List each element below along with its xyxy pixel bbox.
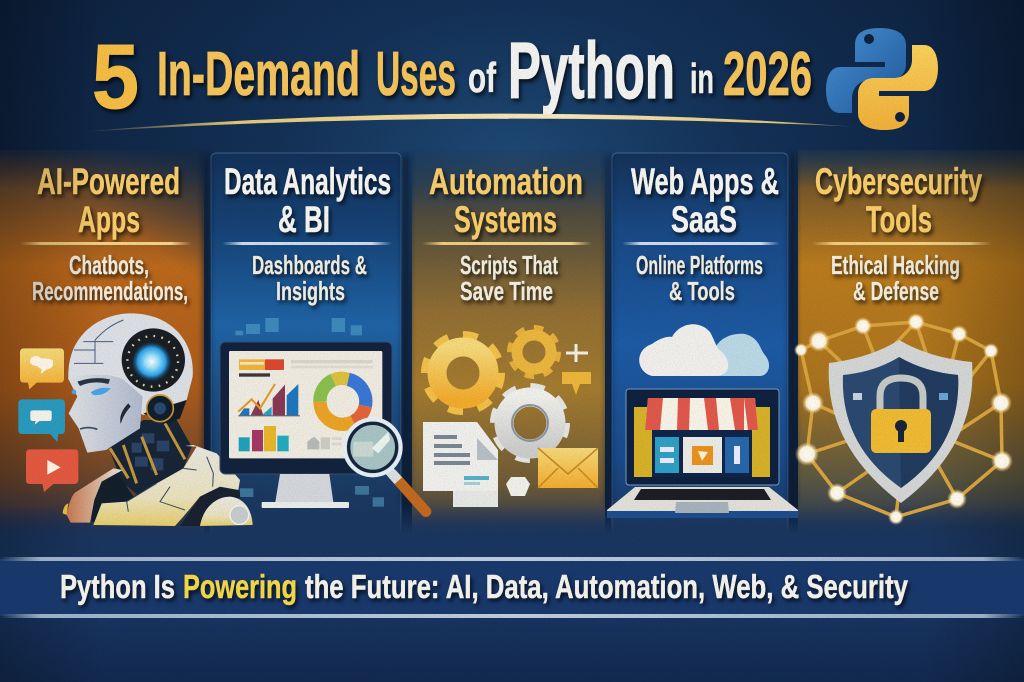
heading: Automation Systems: Automation: [429, 161, 583, 202]
title swoosh: [80, 114, 860, 132]
heading: Data Analytics & BI: Data Analytics: [224, 161, 391, 202]
illustration: robot with chat icons: [18, 313, 253, 526]
icon: small yellow tag: [562, 372, 591, 395]
title: In-Demand: [157, 40, 360, 109]
icon: small blue cloud: [712, 334, 769, 376]
heading: Data Analytics & BI: [224, 161, 391, 240]
title: 2026: [723, 40, 812, 109]
title: 5: [92, 26, 139, 128]
gear: small gold: [510, 328, 558, 376]
shop interior: [652, 428, 752, 477]
icon: orange chat bubble: [20, 348, 64, 389]
heading: AI-Powered Apps: [37, 161, 180, 240]
icon: envelope: [538, 448, 598, 488]
shop awning: [645, 398, 758, 430]
footer tagline: Powering: [183, 568, 297, 605]
footer band: [0, 557, 1024, 618]
donut chart: [320, 378, 366, 424]
icon: white connector: [506, 477, 530, 496]
network lines: [801, 322, 1002, 517]
illustration: cybersecurity shield and network: [794, 313, 1013, 525]
robot head: [68, 313, 193, 453]
heading: Cybersecurity Tools: [815, 161, 982, 240]
bottom band background: [0, 505, 1024, 682]
icon: red video bubble: [26, 449, 78, 492]
title: in: [690, 55, 714, 102]
small icons: [307, 437, 342, 449]
bar columns: [239, 426, 289, 451]
panel: AI-Powered Apps: [0, 150, 204, 535]
robot neck: [108, 420, 192, 500]
dashboard header: [239, 359, 373, 377]
heading: Automation Systems: [429, 161, 583, 240]
subtitle: dashboards: Dashboards &: [252, 250, 367, 280]
gear: silver: [495, 388, 565, 458]
laptop base: [607, 487, 798, 518]
panel: Data Analytics & BI: [211, 153, 401, 535]
heading: Data Analytics & BI: & BI: [278, 199, 330, 240]
subtitle: scripts: [460, 250, 558, 306]
monitor stand: [262, 474, 349, 508]
subtitle: platforms: [636, 250, 763, 306]
icon: plus sign: [566, 344, 588, 362]
footer tagline: Python Is: [60, 568, 175, 605]
subtitle: scripts: Scripts That: [460, 250, 558, 280]
heading: Cybersecurity Tools: Tools: [866, 199, 932, 240]
title: Python: [508, 26, 675, 115]
panel shadows: [203, 155, 796, 505]
subtitle: ethical hacking: [831, 250, 960, 306]
heading: Automation Systems: Systems: [454, 199, 557, 240]
subtitle: chatbots: [32, 250, 188, 306]
icon: python logo: [826, 28, 938, 130]
title: Uses: [376, 40, 456, 109]
title: [92, 26, 812, 128]
network nodes: [794, 313, 1013, 525]
data pixels: [235, 318, 384, 507]
heading: AI-Powered Apps: AI-Powered: [37, 161, 180, 202]
divider: [812, 242, 992, 245]
robot body: [63, 445, 253, 526]
subtitle: ethical hacking: Ethical Hacking: [831, 250, 960, 280]
robot ear joint: [143, 383, 193, 423]
heading: Web Apps & SaaS: [631, 161, 779, 240]
title: of: [468, 54, 497, 101]
subtitle: dashboards: Insights: [276, 276, 345, 306]
subtitle: platforms: Online Platforms: [636, 250, 763, 280]
illustration: automation gears and documents: [423, 328, 598, 507]
heading: Web Apps & SaaS: Web Apps &: [631, 161, 779, 202]
icon: magnifying glass: [345, 419, 426, 512]
heading: AI-Powered Apps: Apps: [78, 199, 140, 240]
subtitle: ethical hacking: & Defense: [853, 276, 939, 306]
shop panels: [655, 437, 749, 473]
laptop screen: [626, 389, 779, 485]
divider: [222, 242, 392, 245]
panel: Automation Systems: [412, 150, 605, 535]
divider: [422, 242, 592, 245]
icon: front document: [423, 422, 498, 491]
subtitle: dashboards: [252, 250, 367, 306]
subtitle: chatbots: Recommendations,: [32, 276, 188, 306]
line and bar chart: [238, 384, 300, 416]
divider: [20, 242, 192, 245]
illustration: web app laptop with cloud: [607, 324, 798, 518]
illustration: dashboard monitor: [220, 318, 392, 508]
footer tagline: [60, 568, 908, 605]
panel: Web Apps & SaaS: [612, 153, 788, 535]
divider: [622, 242, 780, 245]
icon: back document: [453, 463, 498, 507]
shield: [829, 340, 972, 503]
icon: big white cloud: [639, 324, 728, 376]
monitor screen: [229, 351, 382, 458]
gear: large gold: [426, 336, 500, 410]
subtitle: scripts: Save Time: [460, 276, 553, 306]
panel: Cybersecurity Tools: [798, 150, 1024, 535]
heading: Web Apps & SaaS: SaaS: [671, 199, 737, 240]
monitor frame: [220, 342, 392, 474]
icon: teal chat bubble: [18, 399, 65, 442]
subtitle: chatbots: Chatbots,: [69, 250, 149, 280]
padlock: [871, 378, 931, 453]
subtitle: platforms: & Tools: [669, 276, 735, 306]
shop wall: [634, 407, 770, 477]
